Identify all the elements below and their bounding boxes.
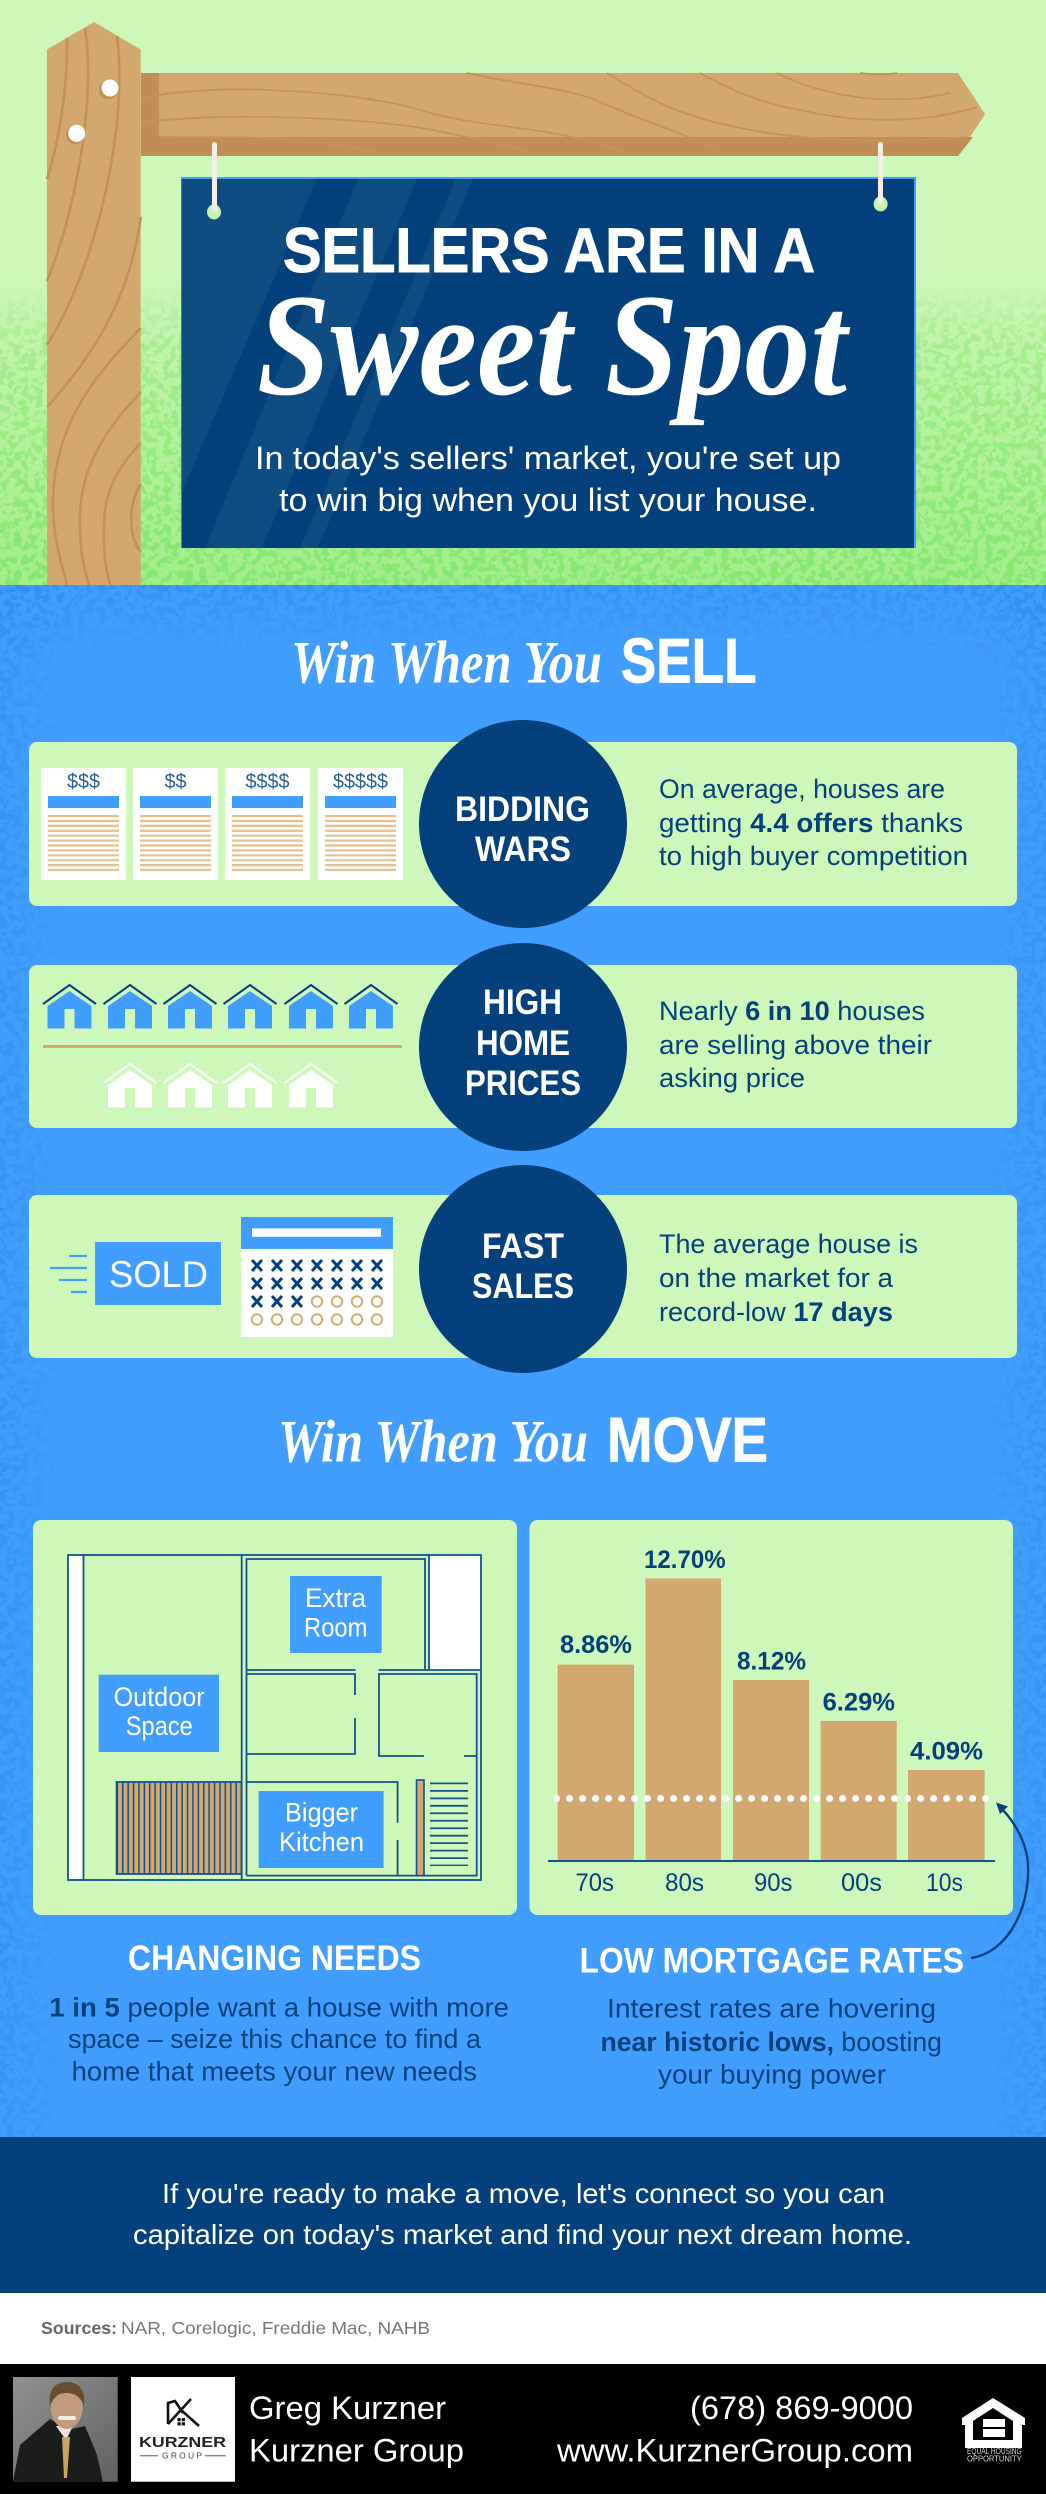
- bars: [558, 1578, 985, 1861]
- panel: floor plan: [33, 1520, 517, 1915]
- circle: high home prices: HIGH: [483, 983, 562, 1022]
- call to action band: [0, 2137, 1046, 2293]
- axis labels: 70s: [576, 1869, 614, 1897]
- heading: win when you move: MOVE: [607, 1406, 768, 1476]
- icon: houses below asking: [104, 1064, 338, 1108]
- white strips: [68, 1555, 481, 1880]
- sources: Sources:: [41, 2318, 117, 2338]
- horizontal beam: [141, 73, 985, 156]
- icon: equal housing opportunity: OPPORTUNITY: [967, 2454, 1022, 2464]
- label: extra room: Room: [304, 1613, 368, 1643]
- text block: changing needs: space – seize this chance to find a: [68, 2024, 482, 2054]
- label: bigger kitchen: [259, 1791, 384, 1868]
- blue section background: [0, 585, 1046, 2137]
- text: prices stat: are selling above their: [659, 1030, 932, 1060]
- circle: fast sales: [419, 1165, 627, 1373]
- subtitle: [255, 440, 841, 518]
- subtitle: In today's sellers' market, you're set up: [255, 440, 841, 476]
- bar values: 8.86%: [560, 1631, 632, 1659]
- icon: sold sign with speed lines: [50, 1242, 221, 1305]
- text: bidding stat: to high buyer competition: [659, 841, 968, 871]
- circle: high home prices: HOME: [476, 1024, 570, 1063]
- agent contact: www.KurznerGroup.com: [556, 2433, 913, 2469]
- text block: low mortgage rates: near historic lows, boosting: [600, 2027, 942, 2057]
- text: prices stat: asking price: [659, 1063, 805, 1093]
- text: bidding stat: getting 4.4 offers thanks: [659, 808, 963, 838]
- agent name: Greg Kurzner: [249, 2390, 446, 2426]
- text block: changing needs: 1 in 5 people want a house with more: [49, 1993, 509, 2023]
- text: prices stat: Nearly 6 in 10 houses: [659, 996, 925, 1026]
- panel: mortgage rate bar chart: [530, 1520, 1013, 1915]
- icon: four offer documents: $$$$: [246, 771, 290, 793]
- axis labels: 80s: [665, 1869, 704, 1897]
- panel: fast sales: [29, 1165, 1017, 1373]
- company logo: [131, 2377, 235, 2482]
- icon: calendar: [241, 1217, 393, 1337]
- wooden sign post: [47, 22, 985, 585]
- bar values: [560, 1546, 983, 1766]
- text: sales stat: [659, 1229, 918, 1327]
- icon: four offer documents: $$$$$: [333, 771, 388, 793]
- sources: [0, 2293, 1046, 2364]
- text: bidding stat: On average, houses are: [659, 774, 945, 804]
- icon: four offer documents: $$: [164, 771, 186, 793]
- sources: NAR, Corelogic, Freddie Mac, NAHB: [121, 2318, 430, 2338]
- label: bigger kitchen: Kitchen: [279, 1827, 364, 1857]
- axis labels: 00s: [841, 1869, 882, 1897]
- text block: low mortgage rates: Interest rates are hovering: [607, 1993, 936, 2023]
- agent contact: [556, 2390, 913, 2469]
- left hanger: [207, 142, 221, 220]
- agent name: [249, 2390, 464, 2469]
- bar values: 6.29%: [823, 1688, 895, 1716]
- panel: high home prices: [29, 943, 1017, 1151]
- label: extra room: [290, 1576, 382, 1653]
- label: outdoor space: Space: [126, 1711, 193, 1741]
- agent name: Kurzner Group: [249, 2433, 464, 2469]
- text: sales stat: on the market for a: [659, 1263, 894, 1293]
- circle: high home prices: PRICES: [465, 1064, 581, 1103]
- dotted current rate line: [557, 1795, 986, 1802]
- company logo: KURZNER: [139, 2434, 226, 2451]
- heading: win when you sell: Win When You: [291, 630, 602, 696]
- circle: bidding wars: WARS: [475, 830, 571, 869]
- deck: [117, 1782, 242, 1874]
- circle: high home prices: [419, 943, 627, 1151]
- subtitle: to win big when you list your house.: [279, 482, 817, 518]
- agent contact: (678) 869-9000: [690, 2390, 913, 2426]
- bar values: 8.12%: [737, 1648, 806, 1676]
- axis labels: [576, 1869, 963, 1897]
- arrow: from low mortgage rates to dotted line: [971, 1802, 1028, 1958]
- hero background: grass and sky: [0, 0, 1046, 585]
- call to action band: If you're ready to make a move, let's connect so you can: [162, 2178, 885, 2209]
- text: prices stat: [659, 996, 932, 1093]
- icon: equal housing opportunity: EQUAL HOUSING: [967, 2446, 1022, 2456]
- floor plan walls: [68, 1555, 481, 1880]
- text block: low mortgage rates: your buying power: [658, 2060, 886, 2090]
- text block: low mortgage rates: LOW MORTGAGE RATES: [580, 1942, 964, 1981]
- call to action band: capitalize on today's market and find your next dream home.: [133, 2219, 912, 2250]
- hanging sign board: [181, 142, 916, 548]
- axis labels: 10s: [926, 1869, 963, 1897]
- text: bidding stat: [659, 774, 968, 871]
- icon: houses above asking: [43, 985, 398, 1028]
- text: sales stat: The average house is: [659, 1229, 918, 1259]
- text block: changing needs: CHANGING NEEDS: [128, 1939, 421, 1978]
- nails: [66, 80, 118, 144]
- text block: changing needs: [49, 1939, 509, 2087]
- bar values: 4.09%: [910, 1738, 983, 1766]
- icon: four offer documents: $$$: [67, 771, 100, 793]
- label: outdoor space: [99, 1675, 219, 1752]
- label: bigger kitchen: Bigger: [285, 1798, 358, 1828]
- circle: bidding wars: BIDDING: [455, 790, 590, 829]
- text block: low mortgage rates: [580, 1942, 964, 2090]
- label: extra room: Extra: [305, 1583, 367, 1613]
- vertical post: [47, 22, 141, 585]
- heading: win when you move: Win When You: [278, 1409, 588, 1475]
- bar values: 12.70%: [644, 1546, 726, 1574]
- title line 2 script: Sweet Spot: [257, 264, 851, 426]
- icon: sold sign with speed lines: SOLD: [109, 1254, 208, 1295]
- agent photo: [13, 2377, 118, 2482]
- right hanger: [874, 142, 888, 212]
- circle: bidding wars: [419, 720, 627, 928]
- agent footer bar: [0, 2364, 1046, 2494]
- icon: equal housing opportunity: [962, 2398, 1025, 2464]
- panel: bidding wars: [29, 720, 1017, 928]
- circle: fast sales: FAST: [482, 1227, 564, 1266]
- title line 1: SELLERS ARE IN A: [283, 216, 815, 286]
- circle: fast sales: SALES: [472, 1267, 574, 1306]
- heading: win when you sell: SELL: [621, 627, 757, 697]
- text: sales stat: record-low 17 days: [659, 1297, 893, 1327]
- text block: changing needs: home that meets your new needs: [72, 2057, 477, 2087]
- icon: four offer documents: [41, 768, 403, 880]
- company logo: GROUP: [162, 2450, 202, 2460]
- axis labels: 90s: [754, 1869, 792, 1897]
- label: outdoor space: Outdoor: [114, 1682, 205, 1712]
